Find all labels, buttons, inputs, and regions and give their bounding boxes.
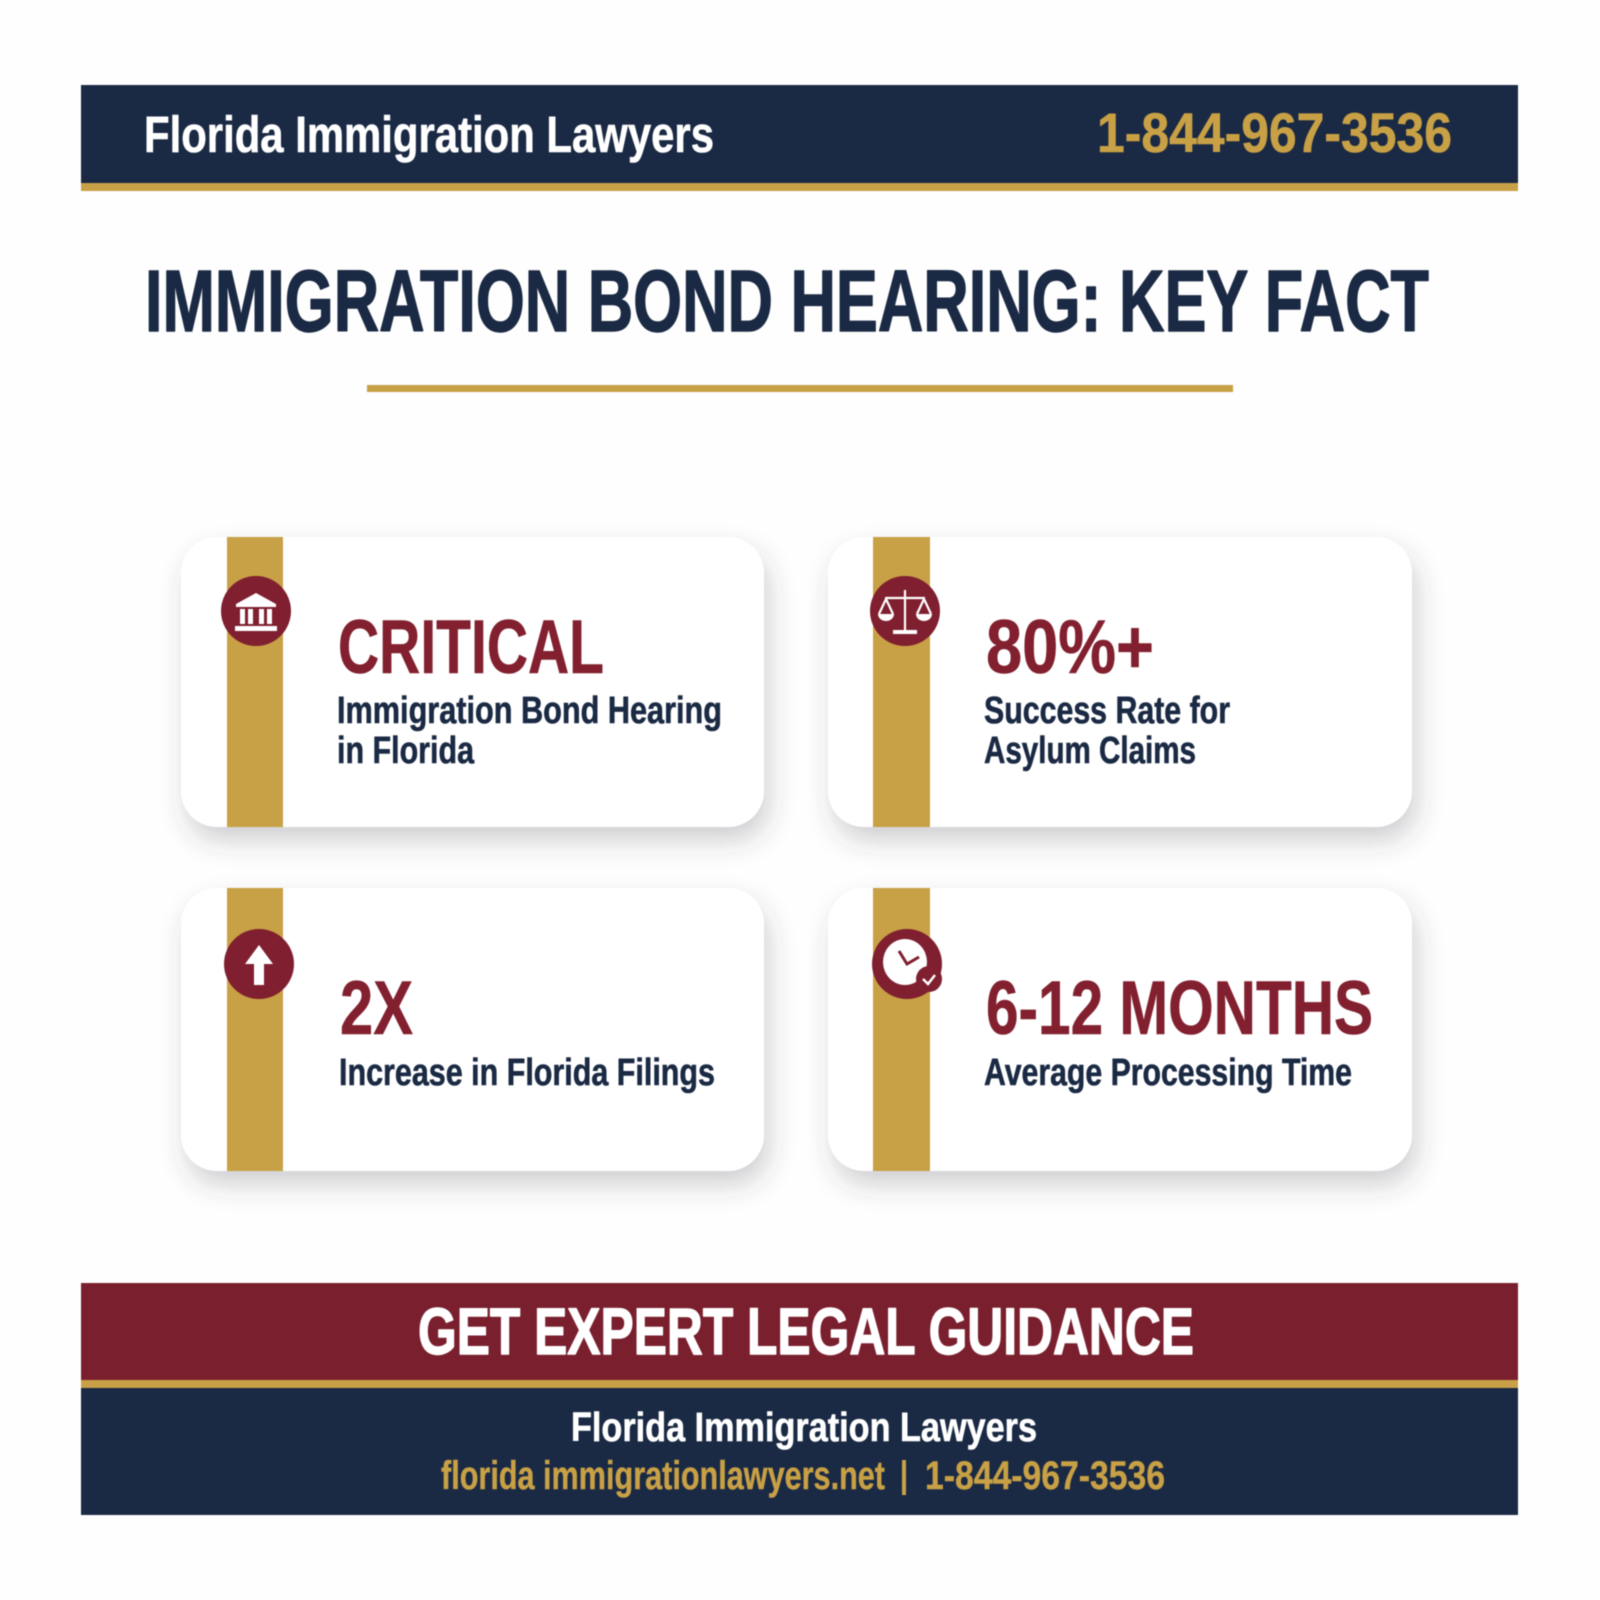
header firm name: Florida Immigration Lawyers <box>144 106 714 163</box>
panel: filings increase <box>181 888 764 1171</box>
panel: success rate <box>828 537 1412 827</box>
panel: processing time <box>828 888 1412 1171</box>
panel: critical <box>181 537 764 827</box>
footer phone: 1-844-967-3536 <box>925 1454 1165 1498</box>
description: in Florida: in Florida <box>337 730 475 772</box>
description: bond hearing: Immigration Bond Hearing <box>337 690 722 732</box>
footer separator <box>902 1460 906 1495</box>
stat: 2X: 2X <box>340 966 413 1051</box>
icon: courthouse <box>221 576 291 646</box>
call to action banner <box>81 1283 1518 1380</box>
title underline <box>367 385 1233 392</box>
description: asylum claims: Asylum Claims <box>984 730 1196 772</box>
stat: 80%+: 80%+ <box>986 605 1154 690</box>
icon: scales <box>870 576 940 646</box>
description: success rate: Success Rate for <box>984 690 1230 732</box>
description: filings: Increase in Florida Filings <box>339 1052 715 1094</box>
icon: up arrow <box>224 929 294 999</box>
footer firm name: Florida Immigration Lawyers <box>571 1404 1037 1450</box>
stat: critical: CRITICAL <box>338 605 604 690</box>
footer contact panel <box>81 1388 1518 1515</box>
header phone number: 1-844-967-3536 <box>1097 101 1452 164</box>
stat: 6-12 months: 6-12 MONTHS <box>986 966 1373 1051</box>
description: processing time: Average Processing Time <box>984 1052 1352 1094</box>
footer website: florida immigrationlawyers.net <box>441 1454 885 1498</box>
gold divider <box>81 1380 1518 1388</box>
call to action text: GET EXPERT LEGAL GUIDANCE <box>418 1294 1194 1368</box>
header banner <box>81 85 1518 191</box>
icon: clock with check <box>872 929 942 999</box>
